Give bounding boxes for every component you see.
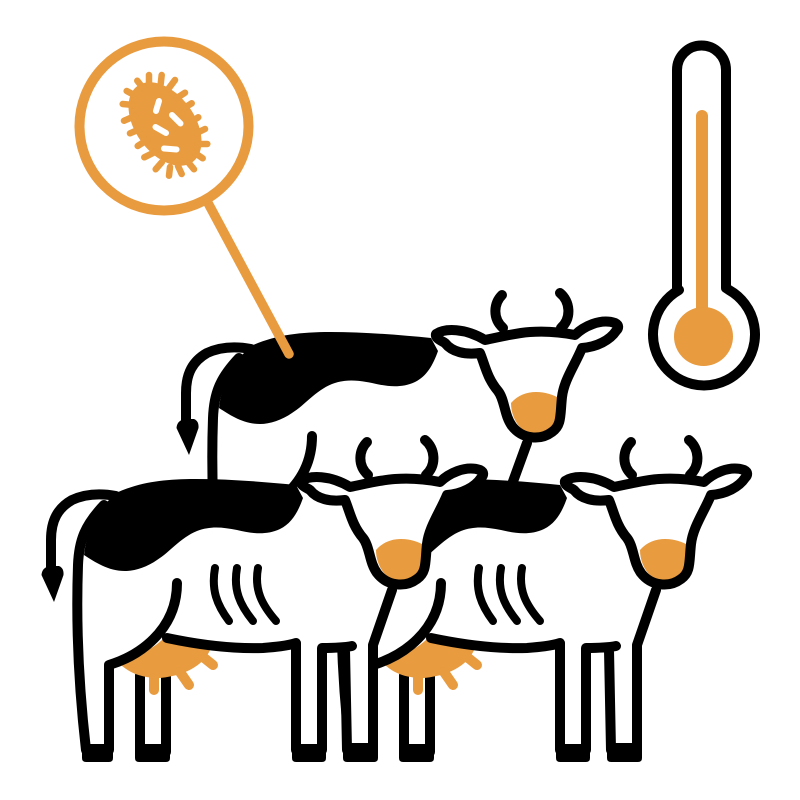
cow: top, back row: [176, 288, 624, 487]
magnifier pointer line: [208, 203, 289, 354]
hooves: [82, 743, 378, 762]
magnifier callout with bacterium: [80, 42, 289, 354]
head: [301, 440, 483, 585]
cow: front left: [42, 440, 483, 762]
body outline: [77, 505, 392, 750]
thermometer: [653, 45, 755, 385]
thermometer outline: [653, 45, 755, 385]
thermometer mercury: [674, 116, 733, 366]
tail: [42, 494, 116, 602]
icon: bacterium: [114, 69, 216, 179]
ribs: [214, 568, 276, 621]
magnifier ring: [80, 42, 248, 210]
udder: [118, 634, 213, 690]
cow: front right: [341, 440, 747, 762]
black patch: [84, 479, 303, 571]
